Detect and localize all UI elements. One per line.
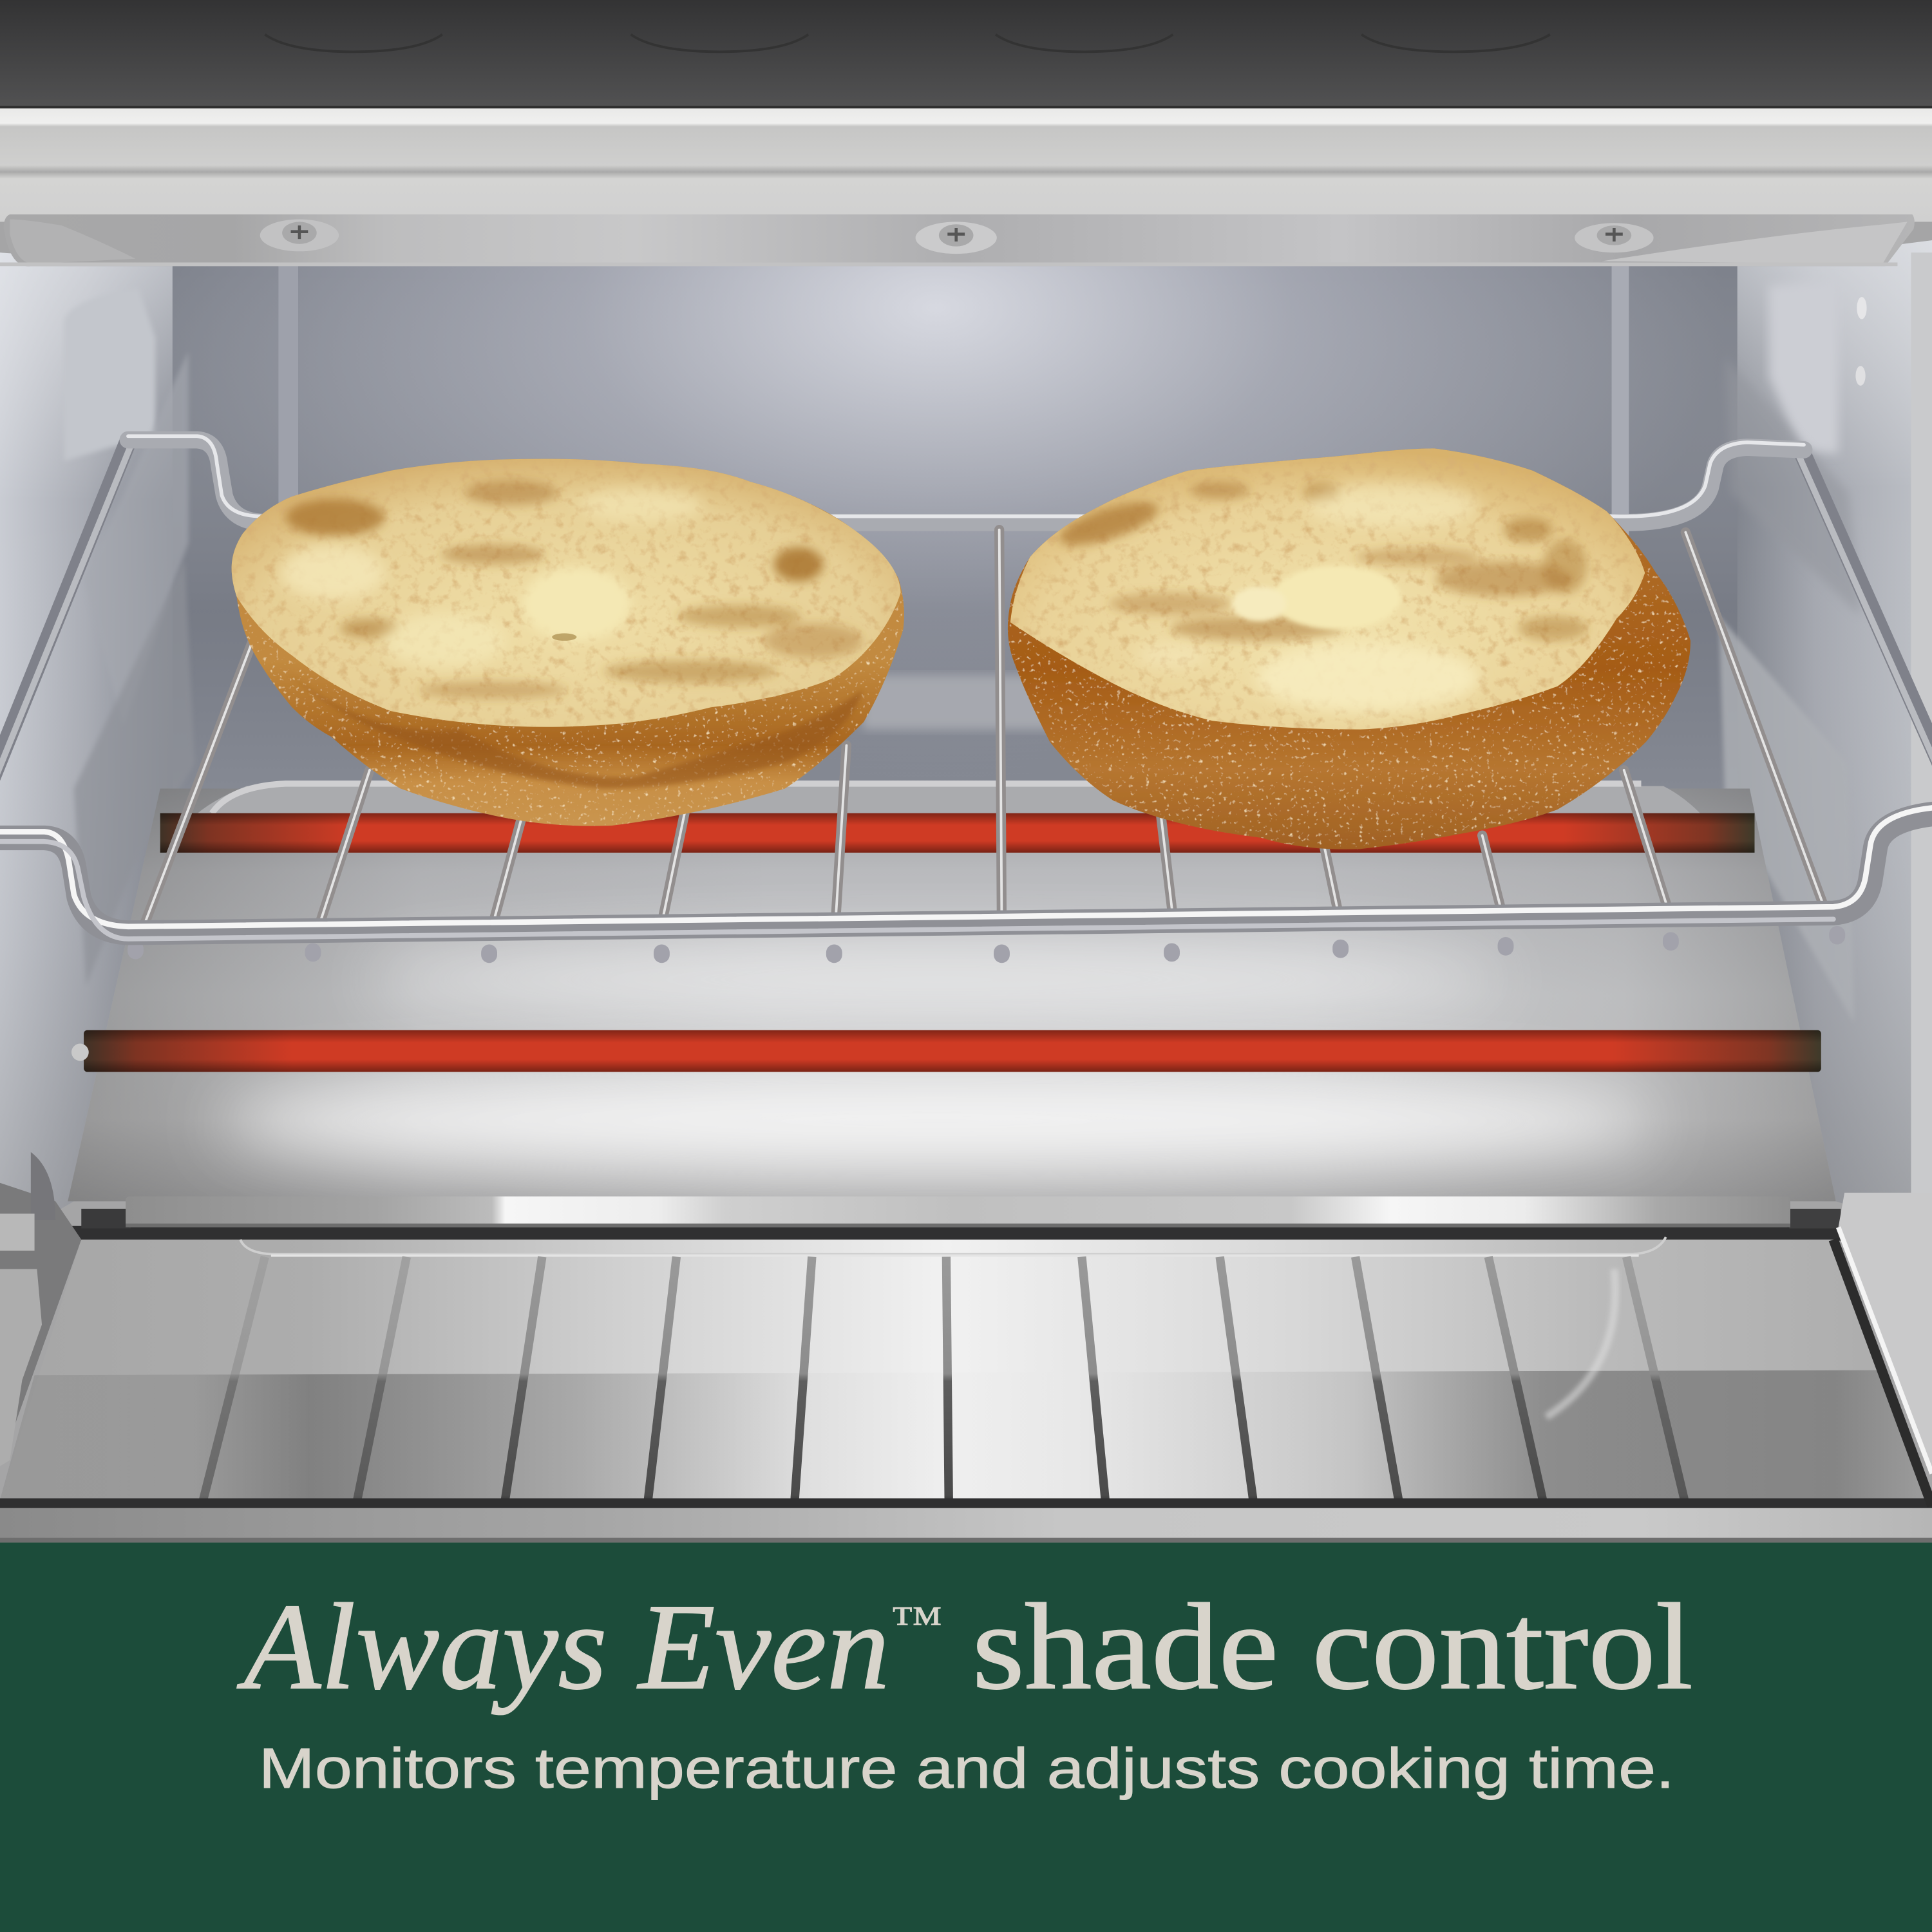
crumb tray lip [0,1197,1842,1241]
oven floor and crumb tray [68,784,1836,1201]
rack cross wires [146,530,1824,924]
top inner reflector bar with screws [0,214,1915,266]
pale soft crumb areas [281,488,703,668]
rack wire highlights [146,530,1824,924]
oven exterior top panel [0,0,1932,109]
rack front rail and handles [0,807,1932,939]
bagel hole [1232,565,1401,630]
pale soft crumb areas [1136,483,1479,712]
upper heating element [160,813,1754,853]
left bagel [232,459,904,826]
toast patches [1055,482,1587,712]
title [237,1579,1693,1715]
dark crust band [286,672,862,788]
right bagel [1008,448,1690,849]
oven door glass [0,1237,1932,1508]
left door hinge [0,1152,81,1466]
oven front frame [0,108,1932,222]
door bottom frame [0,1508,1932,1542]
lower heating element [71,1030,1821,1072]
bagel hole [522,567,631,641]
photo backdrop [0,108,1932,1544]
wire rack [0,436,1932,955]
door reflection curve [1546,1269,1615,1417]
toast patches [281,480,862,699]
subtitle: Monitors temperature and adjusts cooking time. [259,1736,1674,1800]
back wall [160,259,1750,801]
rack feet [135,934,1837,955]
rack back rail and handles [128,436,1804,522]
right side wall [1719,240,1932,1232]
right door hinge [1833,1193,1932,1506]
title: shade control [972,1579,1693,1715]
door vent bars [204,1257,1684,1499]
left side wall [0,252,194,1244]
rack side rails [0,441,1932,779]
title: ™ [891,1597,943,1646]
green caption panel [0,1542,1932,1932]
title: Always Even [237,1579,889,1715]
